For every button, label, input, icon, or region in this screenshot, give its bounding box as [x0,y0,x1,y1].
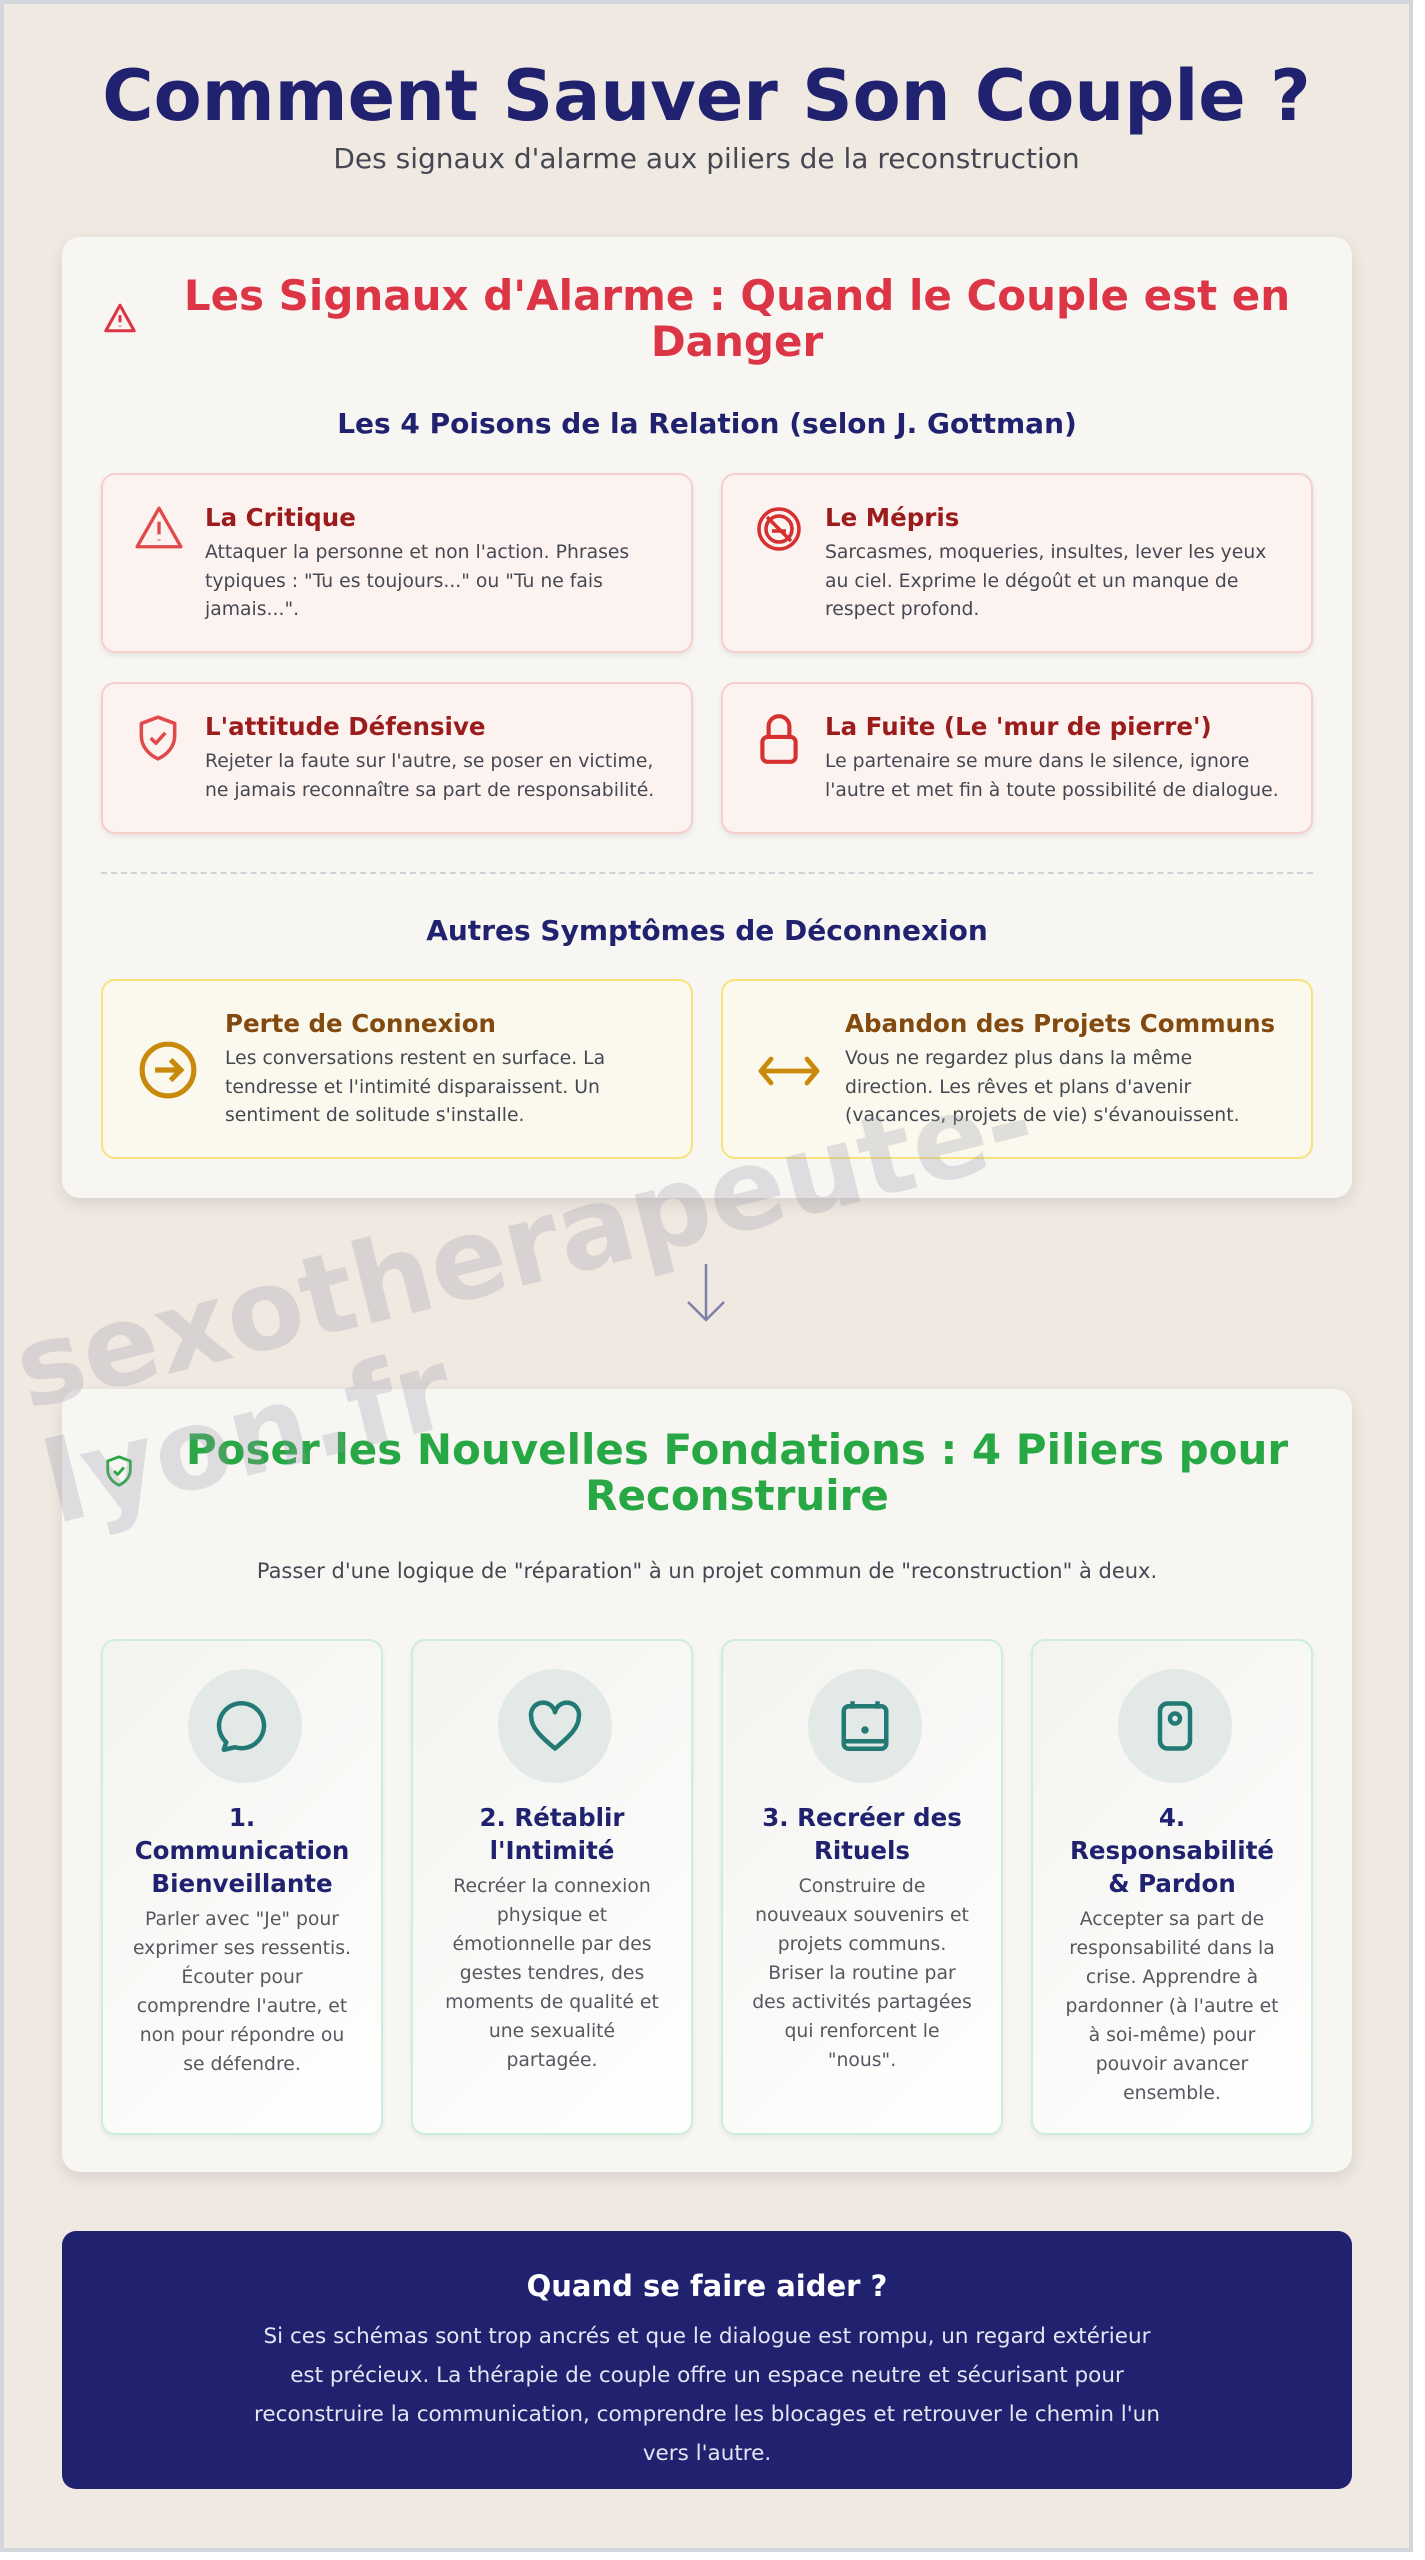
pillar 4: & Pardon [1108,1869,1236,1898]
pillar 1: Communication [135,1836,349,1865]
card: mepris: Le Mépris [825,503,959,532]
pillar 1: Bienveillante [151,1869,333,1898]
pillar 2: 2. Rétablir [479,1803,625,1832]
card: mepris: Sarcasmes, moqueries, insultes, lever les yeux au ciel. Exprime le dégoût et un manque de respect profond. [825,542,1266,620]
icon: shield [140,715,176,761]
card: defensive: L'attitude Défensive [205,712,486,741]
panel: piliers [62,1389,1352,2172]
card: perte de connexion [101,979,693,1159]
icon: speaker [1118,1669,1232,1783]
card: critique: Attaquer la personne et non l'action. Phrases typiques : "Tu es toujours..." ou "Tu ne fais jamais...". [205,542,629,620]
pillar 3: Rituels [814,1836,910,1865]
pillar 4: Responsabilité [1070,1836,1274,1865]
arrow: down [687,1264,725,1322]
pillar 2: l'Intimité [490,1836,614,1865]
card: abandon projets: Abandon des Projets Communs [845,1009,1275,1038]
heading: signaux [184,271,1290,366]
icon: prohibited [757,507,801,551]
pillar 3: "nous". [828,2050,896,2071]
footer text: Si ces schémas sont trop ancrés et que le dialogue est rompu, un regard extérieur est précieux. La thérapie de couple offre un espace neutre et sécurisant pour reconstruire la communication, comprendre les blocages et retrouver le chemin l'un vers l'autre. [254,2324,1160,2466]
pillar 3: nouveaux souvenirs et [755,1905,969,1926]
pillar 3: des activités partagées [752,1992,972,2013]
icon: calendar [808,1669,922,1783]
pillar 4 [1031,1639,1313,2135]
footer: quand se faire aider [62,2231,1352,2489]
heading: signaux: Danger [651,317,823,366]
subheading: autres symptomes: Autres Symptômes de Déconnexion [426,914,988,947]
pillar 3: qui renforcent le [784,2021,940,2042]
card: fuite: Le partenaire se mure dans le silence, ignore l'autre et met fin à toute possibilité de dialogue. [825,751,1279,800]
icon: arrow circle [140,1042,196,1098]
title: Comment Sauver Son Couple ? [102,55,1311,137]
icon: warning [104,304,136,332]
card: critique: La Critique [205,503,356,532]
card: abandon projets: Vous ne regardez plus dans la même direction. Les rêves et plans d'avenir (vacances, projets de vie) s'évanouissent. [845,1048,1240,1126]
pillar 2 [411,1639,693,2135]
card: mepris [721,473,1313,653]
card: defensive: Rejeter la faute sur l'autre, se poser en victime, ne jamais reconnaître sa part de responsabilité. [205,751,654,800]
card: perte de connexion: Les conversations restent en surface. La tendresse et l'intimité disparaissent. Un sentiment de solitude s'installe. [225,1048,605,1126]
card: critique [101,473,693,653]
pillar 3: 3. Recréer des [762,1803,962,1832]
card: fuite [721,682,1313,834]
pillar 3: Briser la routine par [768,1963,956,1984]
card: fuite: La Fuite (Le 'mur de pierre') [825,712,1212,741]
pillar 4: 4. [1159,1803,1185,1832]
icon: chat [188,1669,302,1783]
icon: double arrow [758,1056,820,1086]
intro text: Passer d'une logique de "réparation" à un projet commun de "reconstruction" à deux. [257,1559,1157,1583]
icon: lock [760,714,798,764]
pillar 1: 1. [229,1803,255,1832]
subtitle: Des signaux d'alarme aux piliers de la reconstruction [333,142,1080,175]
subheading: 4 poisons: Les 4 Poisons de la Relation (selon J. Gottman) [337,407,1077,440]
pillar 1 [101,1639,383,2135]
icon: heart [498,1669,612,1783]
card: perte de connexion: Perte de Connexion [225,1009,496,1038]
card: abandon projets [721,979,1313,1159]
heading: fondations: Reconstruire [585,1471,889,1520]
footer heading: Quand se faire aider ? [527,2269,887,2303]
watermark: sexotherapeute- [3,1057,1047,1435]
pillar 3 [721,1639,1003,2135]
pillar 4: Accepter sa part de responsabilité dans la crise. Apprendre à pardonner (à l'autre et à soi-même) pour pouvoir avancer ensemble. [1065,1909,1278,2104]
watermark: lyon.fr [31,1323,465,1550]
pillar 2: Recréer la connexion physique et émotionnelle par des gestes tendres, des moments de qualité et une sexualité partagée. [445,1876,659,2071]
icon: shield check [106,1455,132,1487]
pillar 3: projets communs. [778,1934,946,1955]
pillar 1: Parler avec "Je" pour exprimer ses ressentis. Écouter pour comprendre l'autre, et non pour répondre ou se défendre. [133,1909,351,2075]
panel: signaux d'alarme [62,237,1352,1198]
icon: warning [135,506,182,548]
heading: fondations [186,1425,1288,1520]
heading: signaux: Les Signaux d'Alarme : Quand le Couple est en [184,271,1290,320]
heading: fondations: Poser les Nouvelles Fondations : 4 Piliers pour [186,1425,1288,1474]
card: defensive [101,682,693,834]
pillar 3: Construire de [799,1876,925,1897]
